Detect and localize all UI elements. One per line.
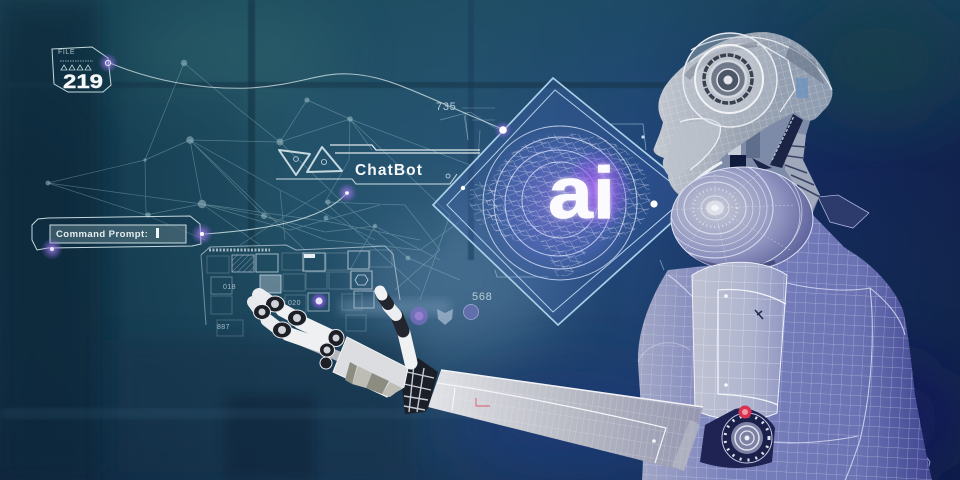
hand xyxy=(253,291,438,414)
elbow joint xyxy=(700,406,775,468)
panel: command prompt xyxy=(32,216,213,260)
panel: ui grid: 020 xyxy=(288,300,301,307)
outer diamond xyxy=(433,78,700,325)
highlighted cell xyxy=(303,253,325,271)
value: 219: 219 xyxy=(63,72,103,93)
ai wordmark: ai xyxy=(548,152,615,234)
shoulder sphere xyxy=(670,166,814,267)
filled cell xyxy=(260,275,281,293)
number labels xyxy=(436,101,505,303)
panel: file counter xyxy=(52,47,118,93)
network constellation lines xyxy=(48,63,495,300)
thumb xyxy=(380,291,411,363)
palm xyxy=(333,337,408,397)
fingers xyxy=(253,295,338,356)
panel: chatbot label xyxy=(276,145,480,203)
concentric rings xyxy=(483,126,637,280)
status strip xyxy=(209,248,270,252)
diamond nodes xyxy=(494,121,512,139)
hexagon cell xyxy=(351,271,372,289)
arm emblem xyxy=(755,310,763,319)
connector curves xyxy=(110,63,500,234)
helmet dark plates xyxy=(684,42,757,80)
label 568: 568 xyxy=(472,291,492,303)
small code labels: 018 xyxy=(223,284,236,291)
side brackets xyxy=(495,124,664,277)
ai diamond hologram xyxy=(433,78,700,325)
glow disc xyxy=(482,125,638,281)
hatched cell xyxy=(232,255,254,272)
purple glow xyxy=(564,148,632,232)
label: ChatBot: ChatBot xyxy=(355,162,423,179)
helmet seam xyxy=(680,119,720,170)
prompt label: Command Prompt: xyxy=(56,229,148,240)
brain wire mesh xyxy=(469,134,651,276)
face panel xyxy=(667,121,720,176)
panel: ui grid: 887 xyxy=(217,324,230,331)
network nodes xyxy=(46,60,410,260)
neck xyxy=(700,105,820,215)
glowing cell xyxy=(310,292,328,310)
red sensor xyxy=(738,406,752,418)
ear rings xyxy=(683,33,777,127)
robot back details xyxy=(818,195,932,480)
robot figure xyxy=(253,20,940,480)
label: file: FILE xyxy=(58,49,75,56)
inner diamond xyxy=(447,90,688,312)
cursor xyxy=(156,228,159,238)
finger joints xyxy=(254,296,344,369)
forearm xyxy=(428,369,703,471)
torso xyxy=(638,215,932,480)
wrist xyxy=(402,358,438,414)
upper arm plate xyxy=(692,262,788,418)
small orb icons xyxy=(410,304,478,325)
label 735: 735 xyxy=(436,101,456,113)
head xyxy=(654,32,832,194)
chat icon: triangles xyxy=(279,147,342,175)
panel: ui grid xyxy=(201,245,400,336)
status triangles xyxy=(61,65,91,70)
